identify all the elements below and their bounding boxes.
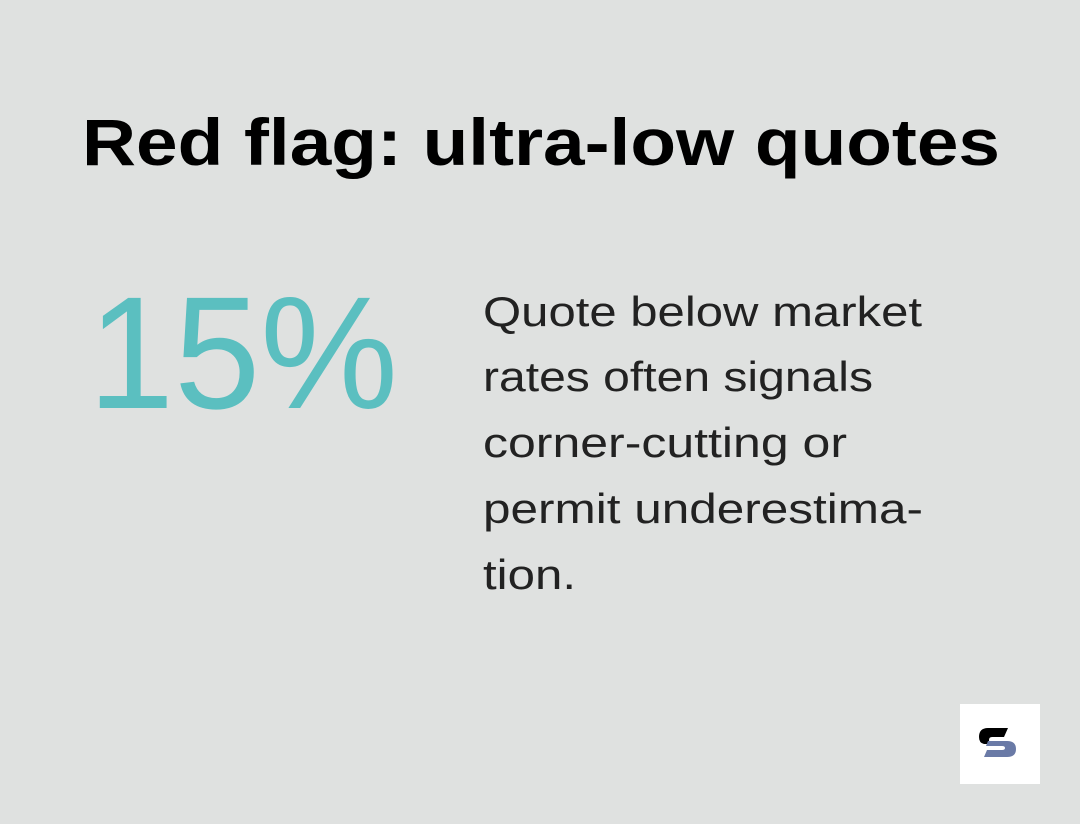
logo bbox=[960, 704, 1040, 784]
description text: permit underestima- bbox=[483, 485, 923, 532]
description text: rates often signals bbox=[483, 353, 873, 400]
description text: Quote below market bbox=[483, 288, 922, 335]
description text: corner-cutting or bbox=[483, 419, 847, 466]
big stat: 15% bbox=[88, 263, 398, 442]
title: Red flag: ultra-low quotes bbox=[82, 105, 1000, 179]
description text: tion. bbox=[483, 551, 576, 598]
description text bbox=[483, 288, 923, 598]
